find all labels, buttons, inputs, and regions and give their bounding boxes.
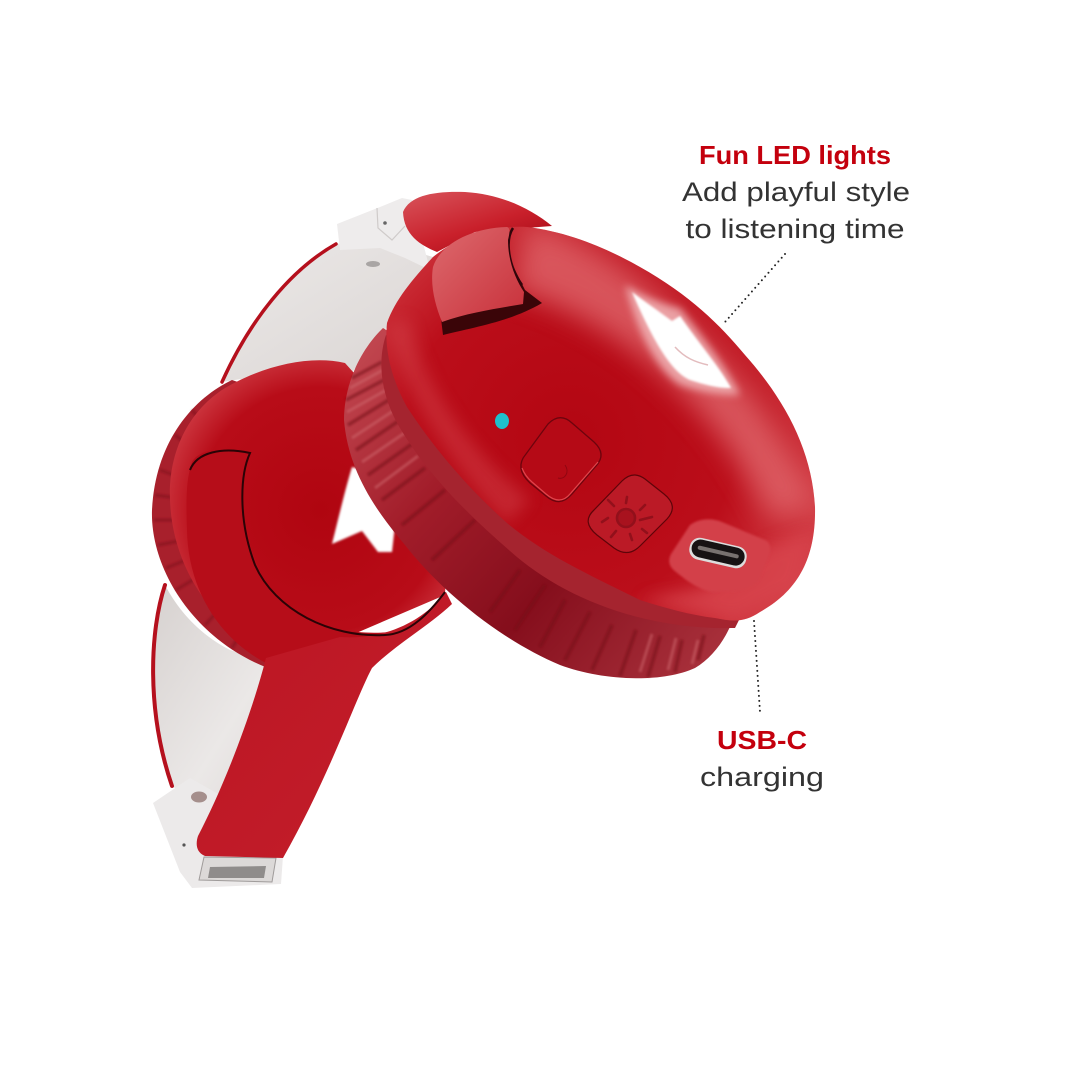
description: charging	[700, 762, 824, 792]
red outer edge of headband	[153, 244, 336, 786]
left hinge crescent with groove	[187, 449, 407, 664]
red upper headband piece	[403, 192, 552, 252]
status LED dot	[495, 413, 509, 429]
glowing fox LED on large cup	[625, 285, 740, 395]
callout: Fun LED lights	[682, 140, 910, 322]
headband inner, lower part	[153, 585, 290, 805]
large ear cup shell	[386, 227, 815, 620]
shell highlights	[387, 222, 820, 622]
left ear pad	[152, 380, 300, 668]
callout: USB-C charging	[700, 621, 824, 792]
multifunction button	[521, 418, 601, 502]
light button with sun icon	[588, 475, 672, 553]
upper hinge cap	[337, 198, 430, 270]
heading: Fun LED lights	[699, 140, 891, 170]
dotted leader line	[754, 621, 760, 712]
dotted leader line	[725, 254, 785, 322]
description	[682, 177, 910, 244]
headband inner, upper part	[222, 240, 450, 382]
fold hinge plate on large cup	[432, 227, 542, 335]
glowing LED star on left cup	[332, 467, 400, 552]
hinge groove line	[190, 451, 445, 635]
description: to listening time	[686, 214, 904, 244]
pad ribs	[346, 362, 704, 677]
sun icon	[602, 497, 652, 540]
heading: USB-C	[717, 725, 807, 755]
lower hinge cap	[153, 778, 283, 888]
USB-C port recess	[669, 519, 770, 592]
inner seam of pad	[381, 335, 745, 628]
infographic canvas	[151, 145, 909, 888]
description: Add playful style	[682, 177, 910, 207]
left ear cup shell	[170, 360, 450, 652]
large ear pad	[344, 328, 745, 678]
headphones product illustration	[152, 192, 820, 888]
USB-C port	[687, 536, 749, 570]
arm connecting cup to hinge	[197, 592, 452, 858]
